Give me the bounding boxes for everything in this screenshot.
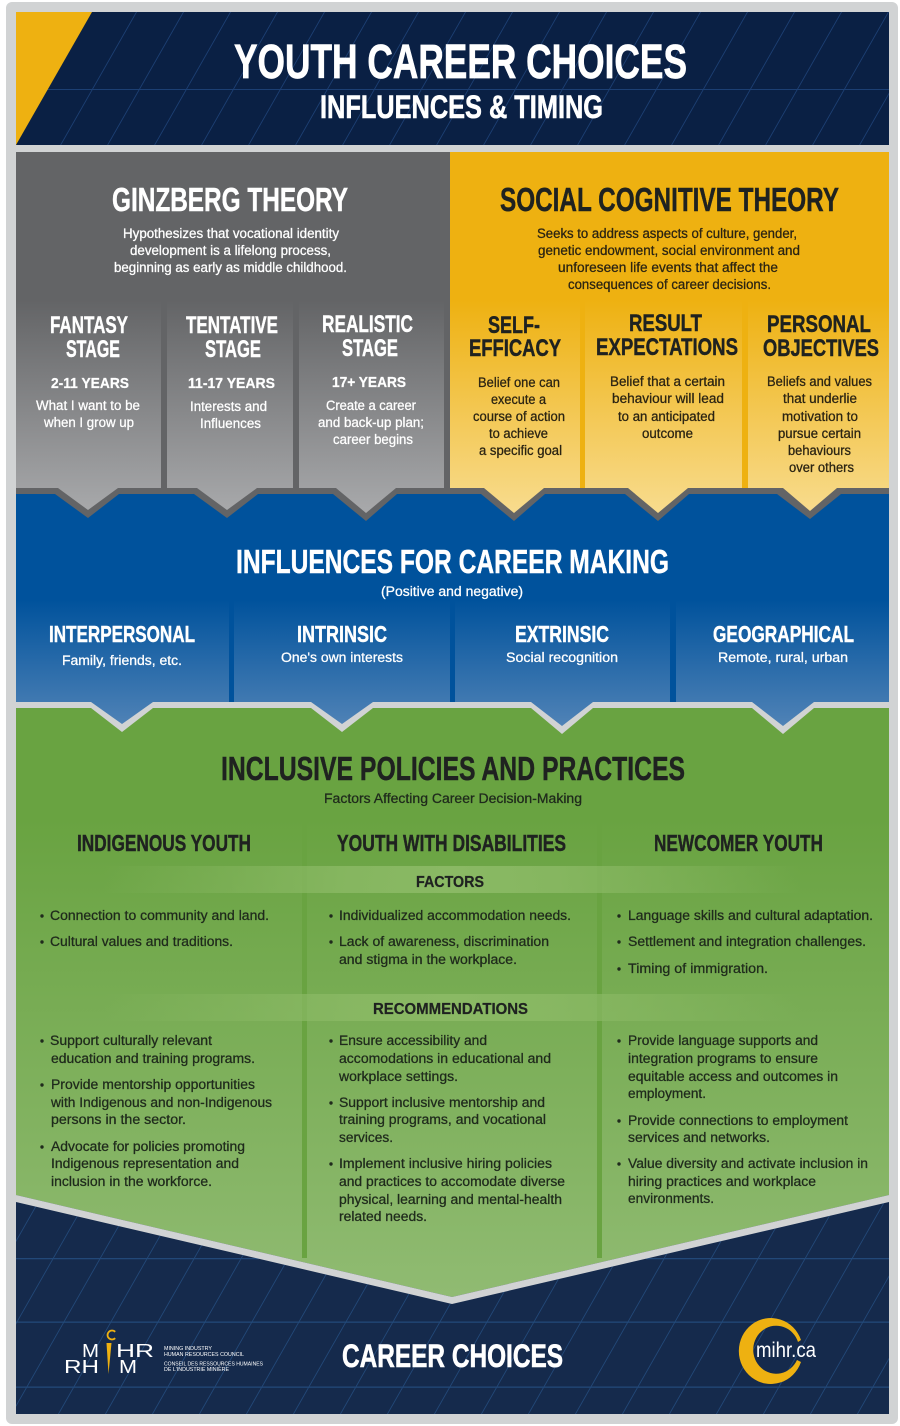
band: factors <box>16 866 889 893</box>
band: factors: FACTORS <box>416 874 484 891</box>
column: intrinsic: INTRINSIC <box>297 621 387 647</box>
column: intrinsic <box>234 600 450 724</box>
column heading: youth with disabilities: YOUTH WITH DISABILITIES <box>337 830 566 856</box>
influences subheading: (Positive and negative) <box>381 584 523 599</box>
logo: MIHR council: M <box>119 1357 137 1377</box>
column: result expectations: RESULT <box>629 310 702 337</box>
recommendations list: newcomer youth: integration programs to ensure <box>628 1051 818 1066</box>
logo: mihr.ca: mihr.ca <box>756 1339 816 1362</box>
social cognitive description: Seeks to address aspects of culture, gender, <box>537 226 797 241</box>
recommendations list: indigenous youth: Support culturally relevant <box>50 1033 212 1048</box>
logo: MIHR council: HR <box>116 1341 154 1361</box>
logo: MIHR council: MINING INDUSTRY <box>164 1346 212 1352</box>
Ginzberg description: Hypothesizes that vocational identity <box>123 226 339 241</box>
recommendations list: newcomer youth: hiring practices and workplace <box>628 1174 816 1189</box>
panel: influences background <box>16 488 889 703</box>
recommendations list: indigenous youth: persons in the sector. <box>51 1112 186 1127</box>
column: self-efficacy: Belief one can <box>478 375 560 390</box>
recommendations list: newcomer youth: equitable access and outcomes in <box>628 1069 838 1084</box>
column: personal objectives: PERSONAL <box>767 311 871 338</box>
column: realistic stage <box>299 300 444 513</box>
inclusive subheading: Factors Affecting Career Decision-Making <box>324 791 582 806</box>
column: fantasy stage <box>16 300 161 510</box>
recommendations list: youth with disabilities: related needs. <box>339 1209 427 1224</box>
column: tentative stage: TENTATIVE <box>186 312 278 339</box>
recommendations list: indigenous youth: Provide mentorship opportunities <box>51 1077 255 1092</box>
column: result expectations <box>585 300 742 513</box>
column: personal objectives <box>748 300 889 511</box>
column: fantasy stage: What I want to be <box>36 398 140 413</box>
title: YOUTH CAREER CHOICES <box>234 36 687 89</box>
factors list: newcomer youth: Timing of immigration. <box>628 961 768 976</box>
column: personal objectives: behaviours <box>788 443 851 458</box>
heading: influences: INFLUENCES FOR CAREER MAKING <box>236 543 669 580</box>
factors list: newcomer youth <box>617 908 873 976</box>
column: personal objectives: that underlie <box>783 391 857 406</box>
column: self-efficacy: to achieve <box>489 426 548 441</box>
column heading: indigenous youth: INDIGENOUS YOUTH <box>77 830 251 856</box>
column: tentative stage: 11-17 YEARS <box>188 376 275 392</box>
recommendations list: youth with disabilities: Implement inclusive hiring policies <box>339 1156 552 1171</box>
recommendations list: youth with disabilities: Ensure accessibility and <box>339 1033 487 1048</box>
column: result expectations: outcome <box>642 426 693 441</box>
factors list: indigenous youth <box>40 908 269 949</box>
column: interpersonal: INTERPERSONAL <box>49 621 195 647</box>
logo: mihr.ca <box>739 1318 816 1384</box>
chevron band under influences <box>16 702 889 734</box>
factors list: youth with disabilities <box>329 908 571 967</box>
recommendations list: youth with disabilities: physical, learning and mental-health <box>339 1192 562 1207</box>
column: geographical <box>676 600 889 726</box>
recommendations list: youth with disabilities: Support inclusive mentorship and <box>339 1095 545 1110</box>
Ginzberg description <box>114 226 347 275</box>
panel: Ginzberg theory <box>16 152 450 513</box>
panel: influences for career making <box>16 543 889 726</box>
social cognitive description: unforeseen life events that affect the <box>558 260 778 275</box>
column: tentative stage: Interests and <box>190 399 267 414</box>
column: extrinsic: Social recognition <box>506 650 618 665</box>
Ginzberg description: beginning as early as middle childhood. <box>114 260 347 275</box>
recommendations list: youth with disabilities: training programs, and vocational <box>339 1112 546 1127</box>
recommendations list: youth with disabilities: workplace settings. <box>338 1069 458 1084</box>
column: intrinsic: One's own interests <box>281 650 403 665</box>
header banner <box>16 12 889 145</box>
footer heading: career choices: CAREER CHOICES <box>342 1338 563 1374</box>
recommendations list: indigenous youth: inclusion in the workforce. <box>51 1174 212 1189</box>
Ginzberg description: development is a lifelong process, <box>130 243 331 258</box>
column: personal objectives: Beliefs and values <box>767 374 872 389</box>
column: personal objectives: over others <box>789 460 854 475</box>
logo: MIHR council: HUMAN RESOURCES COUNCIL <box>164 1352 244 1358</box>
footer banner <box>16 1195 889 1414</box>
column: tentative stage: Influences <box>200 416 261 431</box>
column: result expectations: behaviour will lead <box>612 391 724 406</box>
recommendations list: newcomer youth <box>617 1033 868 1206</box>
recommendations list: indigenous youth: with Indigenous and non-Indigenous <box>50 1095 272 1110</box>
column: self-efficacy <box>450 300 580 513</box>
social cognitive description: genetic endowment, social environment and <box>538 243 800 258</box>
column: extrinsic: EXTRINSIC <box>515 621 609 647</box>
column heading: newcomer youth: NEWCOMER YOUTH <box>654 830 823 856</box>
recommendations list: indigenous youth <box>40 1033 272 1189</box>
column: fantasy stage: when I grow up <box>43 415 134 430</box>
logo: MIHR council: DE L'INDUSTRIE MINIÈRE <box>164 1366 229 1373</box>
column: self-efficacy: execute a <box>491 392 546 407</box>
factors list: newcomer youth: Settlement and integration challenges. <box>628 934 866 949</box>
column: result expectations: EXPECTATIONS <box>596 334 738 361</box>
column: interpersonal <box>16 600 229 724</box>
recommendations list: newcomer youth: services and networks. <box>628 1130 770 1145</box>
column: fantasy stage: 2-11 YEARS <box>51 376 129 392</box>
column: realistic stage: REALISTIC <box>322 311 413 338</box>
recommendations list: newcomer youth: Provide connections to employment <box>628 1113 848 1128</box>
column: personal objectives: pursue certain <box>778 426 861 441</box>
logo: MIHR council <box>64 1331 263 1377</box>
recommendations list: indigenous youth: Indigenous representation and <box>51 1156 239 1171</box>
band: recommendations <box>16 994 889 1021</box>
heading: inclusive policies: INCLUSIVE POLICIES AND PRACTICES <box>221 750 685 787</box>
panel: inclusive policies and practices <box>16 750 889 1258</box>
panel: social cognitive theory <box>450 152 889 513</box>
factors list: indigenous youth: Connection to community and land. <box>50 908 269 923</box>
column: realistic stage: Create a career <box>326 398 416 413</box>
column: realistic stage: 17+ YEARS <box>332 375 406 391</box>
column: result expectations: to an anticipated <box>618 409 715 424</box>
column: self-efficacy: course of action <box>473 409 565 424</box>
panel: inclusive policies background <box>16 708 889 1297</box>
recommendations list: youth with disabilities: and practices to accomodate diverse <box>339 1174 565 1189</box>
chevron band under theories <box>16 488 889 521</box>
recommendations list: indigenous youth: Advocate for policies promoting <box>51 1139 245 1154</box>
column: personal objectives: motivation to <box>782 409 858 424</box>
column: fantasy stage: FANTASY <box>50 312 128 339</box>
factors list: youth with disabilities: Lack of awareness, discrimination <box>339 934 549 949</box>
recommendations list: youth with disabilities: accomodations in educational and <box>339 1051 551 1066</box>
column: realistic stage: STAGE <box>342 335 398 362</box>
column: self-efficacy: EFFICACY <box>469 335 561 362</box>
logo: MIHR council: M <box>82 1341 99 1361</box>
column: tentative stage: STAGE <box>205 336 261 363</box>
logo: MIHR council: RH <box>64 1357 99 1377</box>
column: tentative stage <box>167 300 293 510</box>
social cognitive description <box>537 226 800 292</box>
factors list: newcomer youth: Language skills and cultural adaptation. <box>628 908 873 923</box>
column: realistic stage: and back-up plan; <box>318 415 424 430</box>
recommendations list: indigenous youth: education and training programs. <box>51 1051 255 1066</box>
column: self-efficacy: SELF- <box>488 312 540 339</box>
subtitle: INFLUENCES & TIMING <box>320 89 603 125</box>
column: result expectations: Belief that a certain <box>610 374 725 389</box>
band: recommendations: RECOMMENDATIONS <box>373 1001 528 1018</box>
recommendations list: newcomer youth: Value diversity and activate inclusion in <box>628 1156 868 1171</box>
logo: MIHR council: CONSEIL DES RESSOURCES HUMAINES <box>164 1362 263 1368</box>
recommendations list: newcomer youth: environments. <box>628 1191 714 1206</box>
recommendations list: youth with disabilities <box>329 1033 565 1224</box>
heading: Ginzberg theory: GINZBERG THEORY <box>112 181 348 218</box>
column: interpersonal: Family, friends, etc. <box>62 653 182 668</box>
social cognitive description: consequences of career decisions. <box>568 277 771 292</box>
column: self-efficacy: a specific goal <box>479 443 562 458</box>
column: realistic stage: career begins <box>333 432 413 447</box>
factors list: youth with disabilities: and stigma in the workplace. <box>339 952 517 967</box>
recommendations list: youth with disabilities: services. <box>339 1130 393 1145</box>
factors list: youth with disabilities: Individualized accommodation needs. <box>339 908 571 923</box>
column: extrinsic <box>455 600 670 726</box>
column: geographical: GEOGRAPHICAL <box>713 621 854 647</box>
recommendations list: newcomer youth: employment. <box>628 1086 706 1101</box>
column: fantasy stage: STAGE <box>66 336 120 363</box>
factors list: indigenous youth: Cultural values and traditions. <box>50 934 233 949</box>
recommendations list: newcomer youth: Provide language supports and <box>628 1033 818 1048</box>
column: geographical: Remote, rural, urban <box>718 650 848 665</box>
